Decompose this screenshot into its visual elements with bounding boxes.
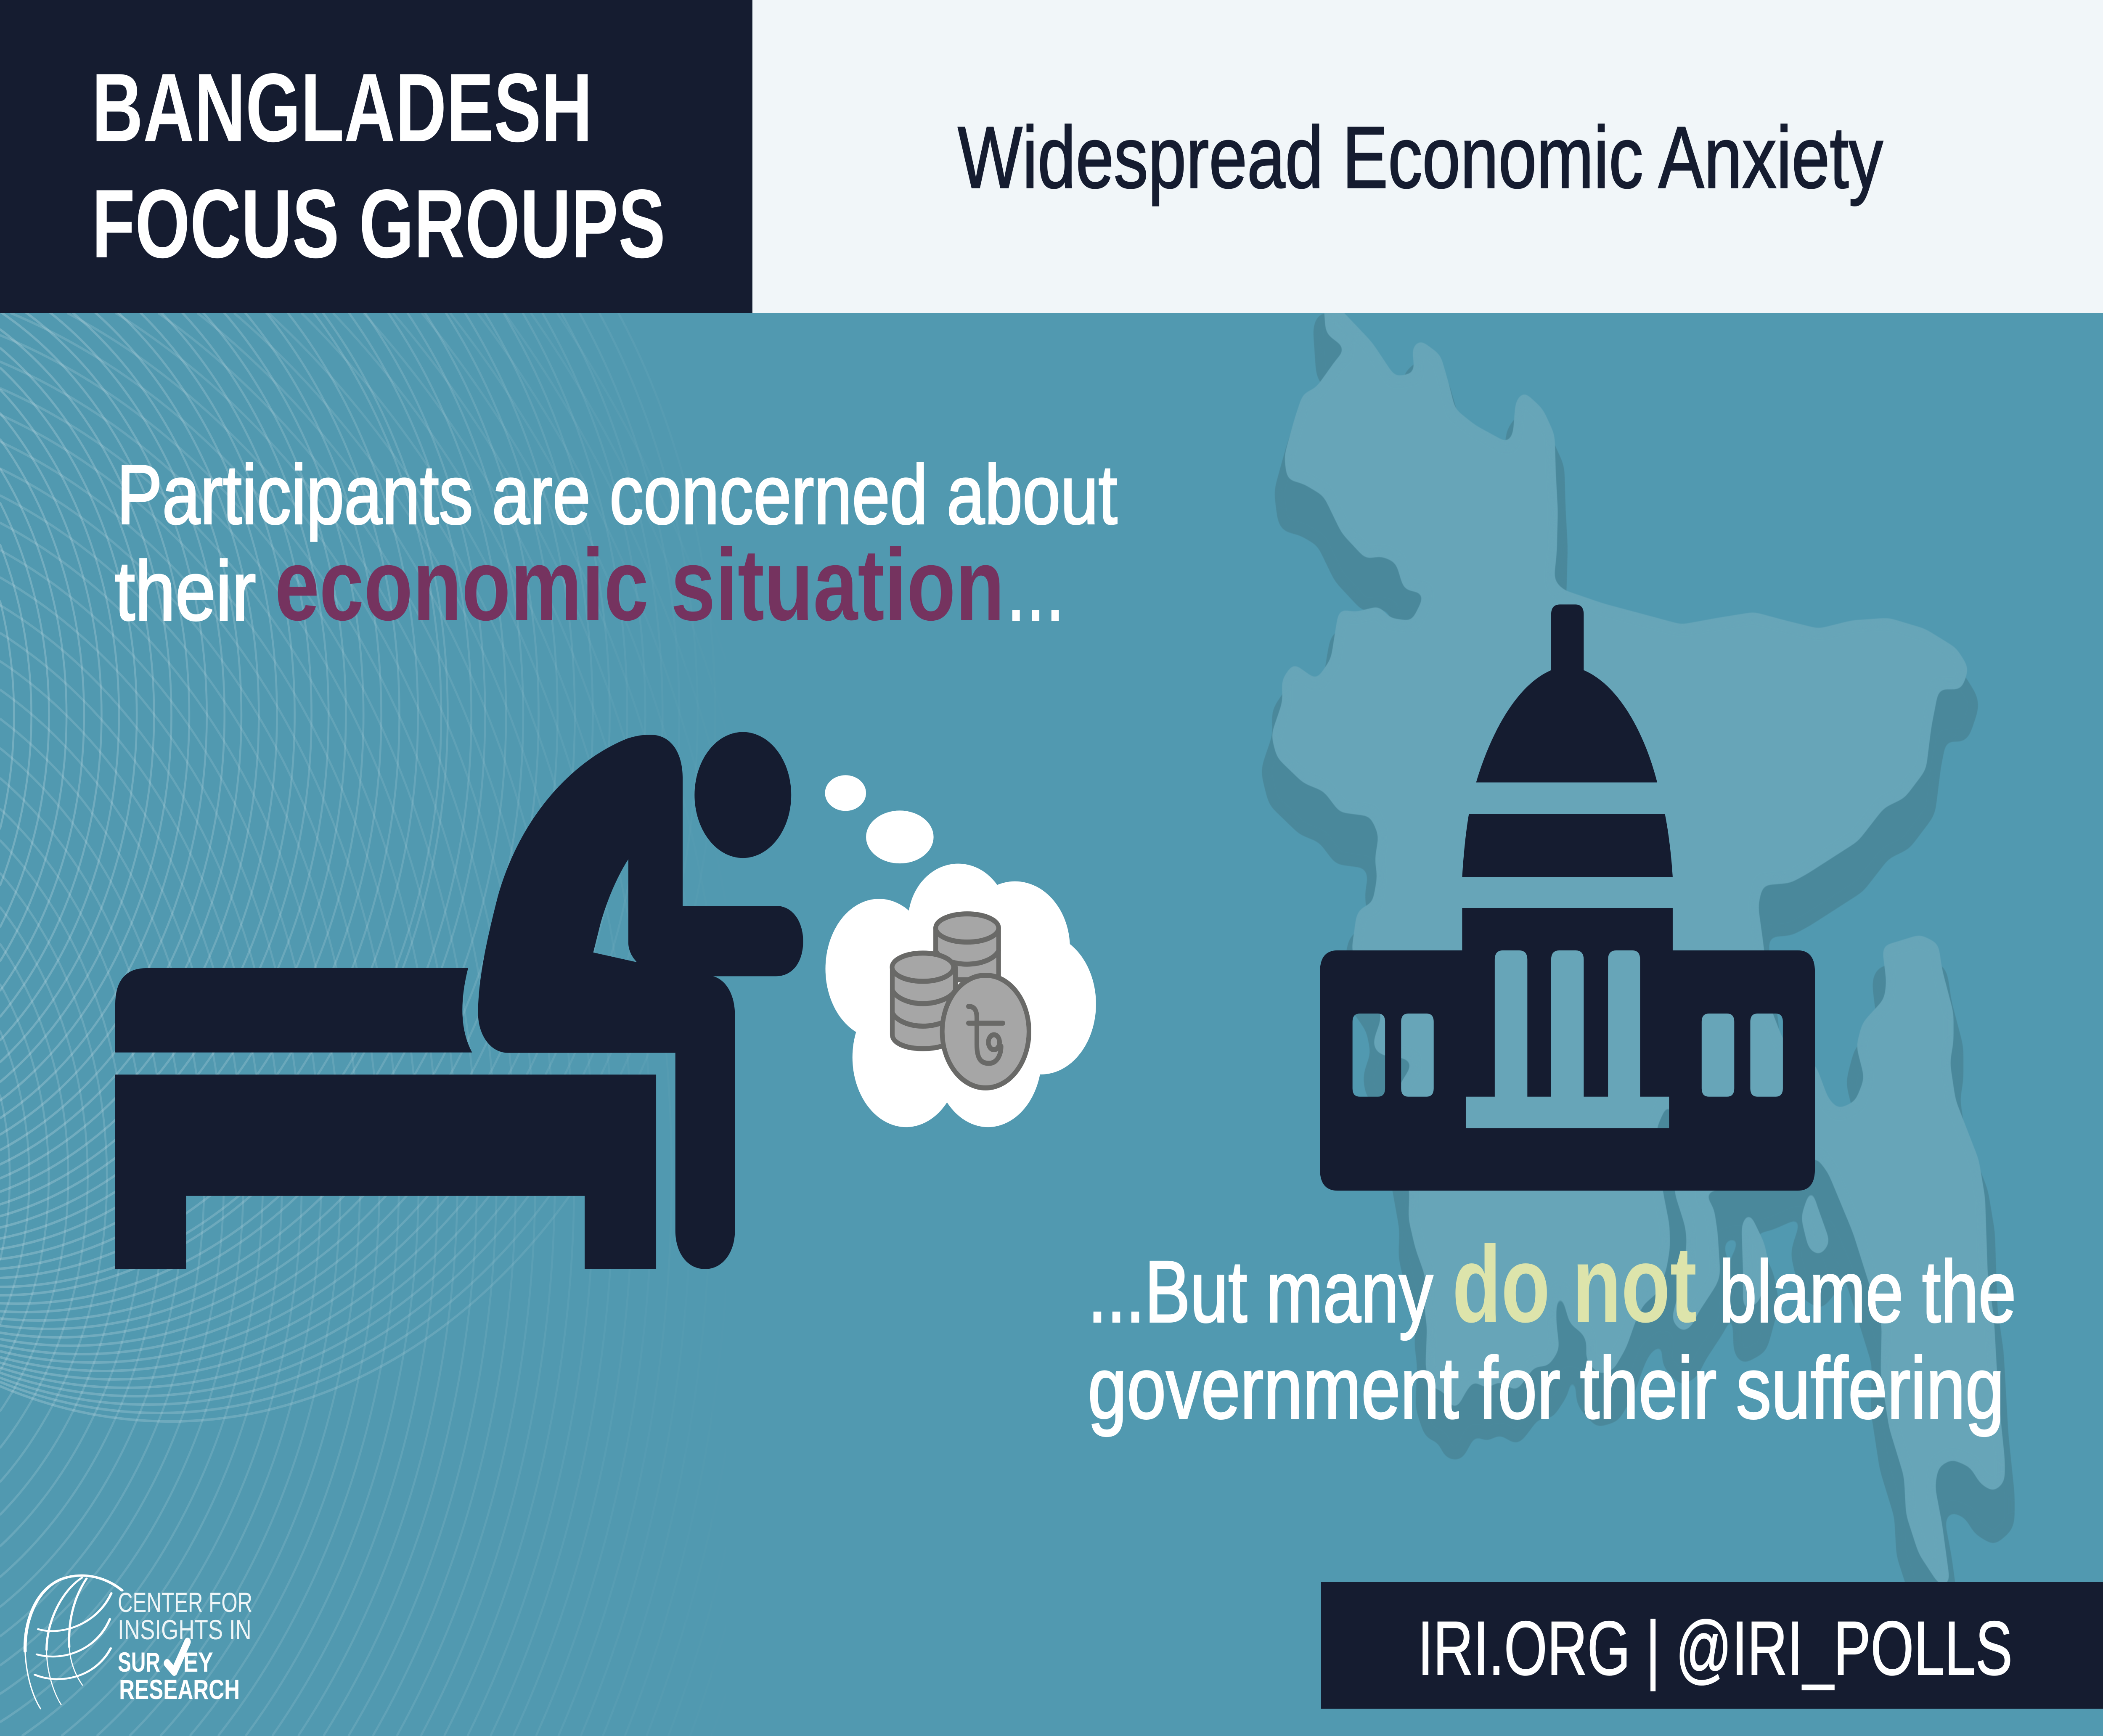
map shadow xyxy=(1273,331,2003,1619)
small thought bubble xyxy=(825,775,866,811)
person head xyxy=(694,732,791,858)
map land xyxy=(1273,294,2003,1582)
footer background xyxy=(1321,1582,2103,1709)
bed base xyxy=(115,1074,656,1269)
coin stacks xyxy=(892,914,1029,1088)
text: do not blame government: blame the xyxy=(1719,1243,2016,1341)
dome xyxy=(1476,604,1657,782)
cloud xyxy=(826,864,1096,1127)
logo text: SUR xyxy=(118,1647,160,1678)
header xyxy=(0,0,2103,313)
logo globe xyxy=(25,1575,122,1709)
title xyxy=(92,53,665,278)
logo text xyxy=(118,1588,252,1705)
text: do not blame government: do not xyxy=(1452,1223,1697,1345)
taka coin xyxy=(942,975,1029,1088)
icon: person sitting on bed xyxy=(115,732,934,1269)
footer bar xyxy=(1321,1582,2103,1709)
map of Bangladesh with shadow xyxy=(1273,294,2003,1619)
text: participants concern: ... xyxy=(1007,544,1064,638)
icon: government building xyxy=(1320,604,1815,1191)
text: participants concern: Participants are concerned about xyxy=(117,447,1118,542)
logo: Center for Insights in Survey Research xyxy=(25,1575,252,1709)
person body xyxy=(478,735,803,1269)
text: do not blame government xyxy=(1088,1223,2016,1437)
text: do not blame government: ...But many xyxy=(1088,1243,1433,1341)
header right panel xyxy=(752,0,2103,313)
subtitle: Widespread Economic Anxiety xyxy=(958,109,1883,206)
dome band xyxy=(1462,814,1673,877)
footer text: IRI.ORG | @IRI_POLLS xyxy=(1418,1606,2013,1691)
text: participants concern xyxy=(115,447,1118,642)
title: BANGLADESH xyxy=(92,53,593,162)
taka symbol xyxy=(969,1006,1003,1064)
logo check mark xyxy=(167,1642,188,1672)
title: FOCUS GROUPS xyxy=(92,169,665,278)
logo text: CENTER FOR xyxy=(118,1588,252,1618)
bed cushion xyxy=(115,968,472,1053)
logo text: EY xyxy=(183,1647,213,1678)
text: do not blame government: government for their suffering xyxy=(1088,1339,2005,1437)
text: participants concern: economic situation xyxy=(275,528,1004,642)
building body with columns and windows xyxy=(1320,908,1815,1191)
icon: thought cloud with coins xyxy=(826,864,1096,1127)
logo text: INSIGHTS IN xyxy=(118,1615,252,1646)
header left panel xyxy=(0,0,752,313)
text: participants concern: their xyxy=(115,544,256,638)
logo text: RESEARCH xyxy=(119,1675,240,1705)
medium thought bubble xyxy=(866,810,934,863)
